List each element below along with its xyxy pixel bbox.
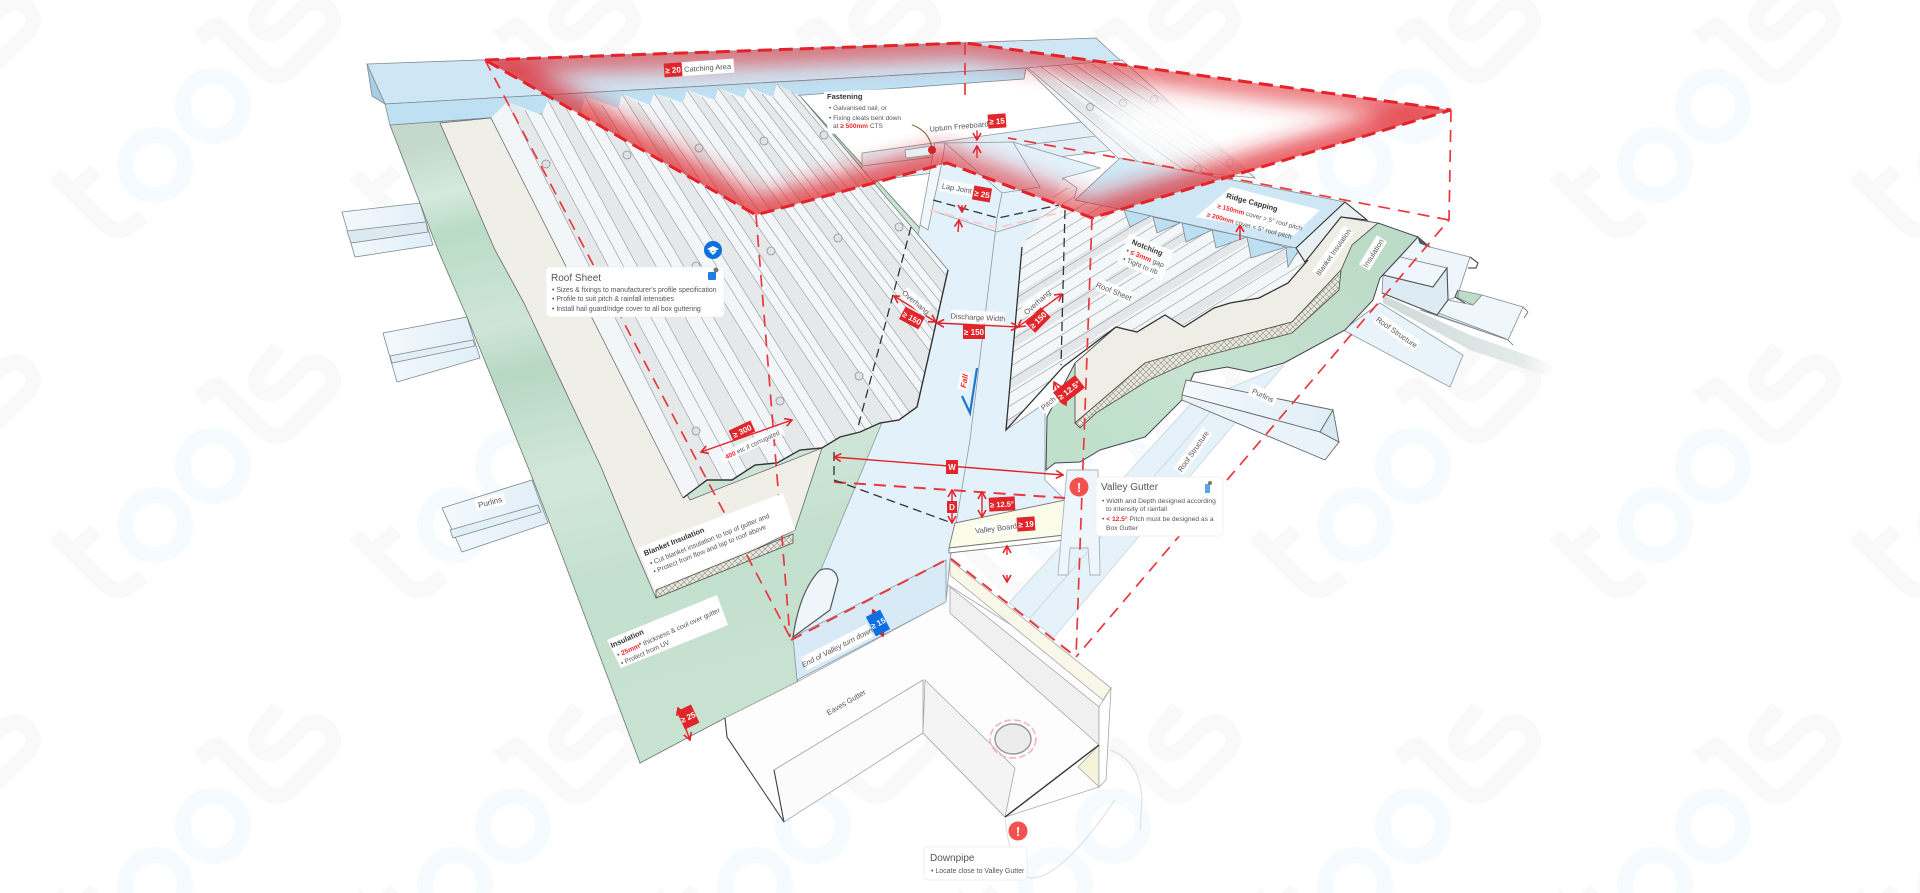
- label: roof structure upper: Roof Structure: [1374, 315, 1419, 350]
- label: corrugated note: 400 etc if corrugated: [724, 430, 781, 461]
- badge: valley board: ≥ 19: [1018, 519, 1035, 530]
- card: valley gutter: Box Gutter: [1106, 525, 1139, 532]
- label: ridge capping: Ridge Capping: [1225, 191, 1279, 214]
- card: downpipe: • Locate close to Valley Gutter: [931, 868, 1025, 875]
- badge: insulation overlap: ≥ 25: [679, 710, 698, 725]
- label: roof sheet small: Roof Sheet: [1095, 280, 1134, 303]
- card: roof sheet: Roof Sheet: [551, 273, 601, 284]
- label: upturn freeboard: Upturn Freeboard: [929, 119, 989, 134]
- badge: lap joint: [972, 186, 992, 202]
- label: blanket insulation left: • Cut blanket insulation to top of gutter and: [649, 513, 771, 567]
- card: downpipe: [924, 847, 1027, 880]
- card: downpipe: Downpipe: [930, 853, 975, 864]
- label: fastening: [824, 88, 912, 134]
- icon: warning valley: [1070, 478, 1088, 496]
- roof structure upper right: [1343, 303, 1463, 387]
- ridge capping left: [367, 38, 1122, 125]
- label: purlins right: [1248, 384, 1278, 406]
- icon: warning valley: !: [1077, 480, 1081, 495]
- label: insulation left: Insulation: [609, 627, 646, 650]
- red dashed projection lines: [485, 43, 1451, 657]
- label: eaves gutter: Eaves Gutter: [825, 687, 868, 717]
- label: blanket insulation right: Blanket Insulation: [1316, 228, 1353, 278]
- label: ridge capping: ≥ 200mm cover < 5° roof pitch: [1206, 211, 1293, 241]
- card: roof sheet: • Profile to suit pitch & rainfall intensities: [552, 296, 674, 303]
- card: valley gutter: • < 12.5° Pitch must be designed as a: [1102, 515, 1214, 523]
- badge: valley pitch: [989, 496, 1015, 512]
- column profile: [1058, 470, 1100, 575]
- badge: freeboard: [988, 113, 1006, 129]
- fastening bracket: [905, 123, 936, 158]
- badge: overhang left: [899, 307, 925, 329]
- label: valley board: Valley Board: [975, 521, 1017, 536]
- label: pitch: Pitch: [1039, 395, 1058, 412]
- screws on roof sheet: [542, 131, 903, 435]
- icon: image gallery: [1205, 481, 1212, 493]
- badge: valley board: [1017, 516, 1035, 532]
- purlins upper right: [1382, 237, 1555, 377]
- card: valley gutter: [1096, 477, 1223, 536]
- card: valley gutter: Valley Gutter: [1101, 482, 1159, 493]
- badge: cover 300: ≥ 300: [731, 423, 754, 440]
- pale lap dash: [930, 210, 1062, 228]
- roof sheet right: [1005, 180, 1308, 432]
- label: fastening: at ≥ 500mm CTS: [833, 123, 883, 130]
- badge: discharge width: ≥ 150: [964, 328, 985, 337]
- label: insulation left: • 25mm* thickness & cool over gutter: [616, 607, 722, 659]
- label: catching area: [664, 59, 734, 77]
- catching area: [485, 43, 1451, 218]
- label: insulation left: • Protect from UV: [620, 639, 671, 667]
- label: insulation right: Insulation: [1361, 237, 1386, 269]
- badge: cover 300: [729, 420, 755, 442]
- label: pitch: [1036, 392, 1060, 414]
- card: valley gutter: • Width and Depth designed according: [1102, 498, 1216, 505]
- label: roof structure lower: Roof Structure: [1176, 429, 1211, 474]
- fall arrow: [958, 368, 977, 413]
- outlet: [990, 720, 1036, 758]
- purlins left: [342, 203, 548, 552]
- label: discharge width: Discharge Width: [950, 312, 1006, 323]
- badge: overhang right: [1025, 307, 1051, 333]
- insulation fold: [1418, 237, 1430, 247]
- label: notching: • ≤ 3mm gap: [1125, 248, 1165, 269]
- dimension arrows: [678, 130, 1278, 740]
- card: roof sheet: • Install hail guard/ridge cover to all box guttering: [552, 306, 701, 313]
- label: blanket insulation left: [638, 493, 795, 590]
- badge: pitch: ≥ 12.5°: [1057, 379, 1082, 402]
- label: overhang left: Overhang: [900, 288, 931, 316]
- downpipe outline: [1005, 750, 1142, 878]
- badge: width: [946, 460, 958, 474]
- card: valley gutter: to intensity of rainfall: [1106, 506, 1167, 513]
- label: lap joint: Lap Joint: [941, 181, 974, 196]
- icon: graduation cap: [704, 241, 722, 259]
- valley gutter curled edge: [793, 569, 838, 637]
- purlin label left: Purlins: [477, 495, 503, 510]
- badge: discharge width: [963, 325, 985, 339]
- badge: insulation overlap: [677, 704, 700, 729]
- label: blanket insulation left: Blanket Insulation: [642, 525, 706, 558]
- badge: pitch: [1053, 375, 1085, 405]
- right screws: [1075, 96, 1234, 321]
- icon: warning downpipe: [1008, 822, 1028, 840]
- blanket insulation right: [1075, 217, 1378, 428]
- card: roof sheet: [546, 267, 724, 317]
- icon: warning downpipe: !: [1016, 824, 1020, 839]
- purlin label left: [474, 492, 506, 512]
- label: notching: • Tight to rib: [1122, 256, 1159, 276]
- label: purlins right: Purlins: [1250, 387, 1275, 404]
- label: end of valley turn down: End of Valley turn down: [800, 626, 874, 669]
- insulation right: [1046, 223, 1418, 470]
- badge: overhang left: ≥ 150: [901, 310, 923, 327]
- badge: depth: [947, 501, 957, 513]
- label: catching area: Catching Area: [684, 62, 732, 74]
- roof structure lower: [1009, 365, 1284, 637]
- label: fastening: Fastening: [827, 92, 863, 101]
- label: catching area: ≥ 20: [665, 65, 682, 75]
- card: roof sheet: • Sizes & fixings to manufacturer's profile specification: [552, 287, 717, 294]
- label: ridge capping: ≥ 150mm cover > 5° roof pitch: [1216, 202, 1304, 233]
- fall arrow: Fall: [959, 373, 970, 389]
- icon: image gallery: [708, 268, 718, 280]
- badge: valley pitch: ≥ 12.5°: [990, 499, 1014, 510]
- badge: width: W: [948, 463, 956, 472]
- label: notching: Notching: [1131, 237, 1164, 258]
- label: ridge capping: [1196, 187, 1320, 243]
- right upper roof sheet: [1026, 60, 1265, 180]
- label: fastening: • Fixing cleats bent down: [829, 115, 901, 122]
- label: insulation left: [607, 595, 728, 668]
- purlin right: [1182, 380, 1339, 460]
- roof sheet left: [490, 84, 949, 498]
- black dashed lines: [834, 200, 1065, 523]
- badge: turn down: ≥ 15: [869, 616, 888, 631]
- valley board: [949, 500, 1066, 553]
- badge: lap joint: ≥ 25: [973, 189, 991, 200]
- badge: freeboard: ≥ 15: [989, 116, 1006, 127]
- label: blanket insulation left: • Protect from flow and lap to roof above: [652, 524, 767, 576]
- blanket insulation left: [440, 118, 822, 598]
- eaves gutter: [725, 560, 1111, 822]
- badge: depth: D: [949, 503, 955, 512]
- label: fastening: • Galvanised nail, or: [829, 105, 888, 112]
- label: notching: [1117, 233, 1174, 281]
- insulation left: [390, 96, 935, 763]
- beam behind valley: [862, 118, 1114, 182]
- valley gutter: [793, 142, 1100, 680]
- badge: overhang right: ≥ 150: [1028, 310, 1049, 331]
- badge: turn down: [866, 609, 890, 636]
- ridge capping right: [1075, 158, 1367, 267]
- label: overhang right: Overhang: [1022, 288, 1053, 317]
